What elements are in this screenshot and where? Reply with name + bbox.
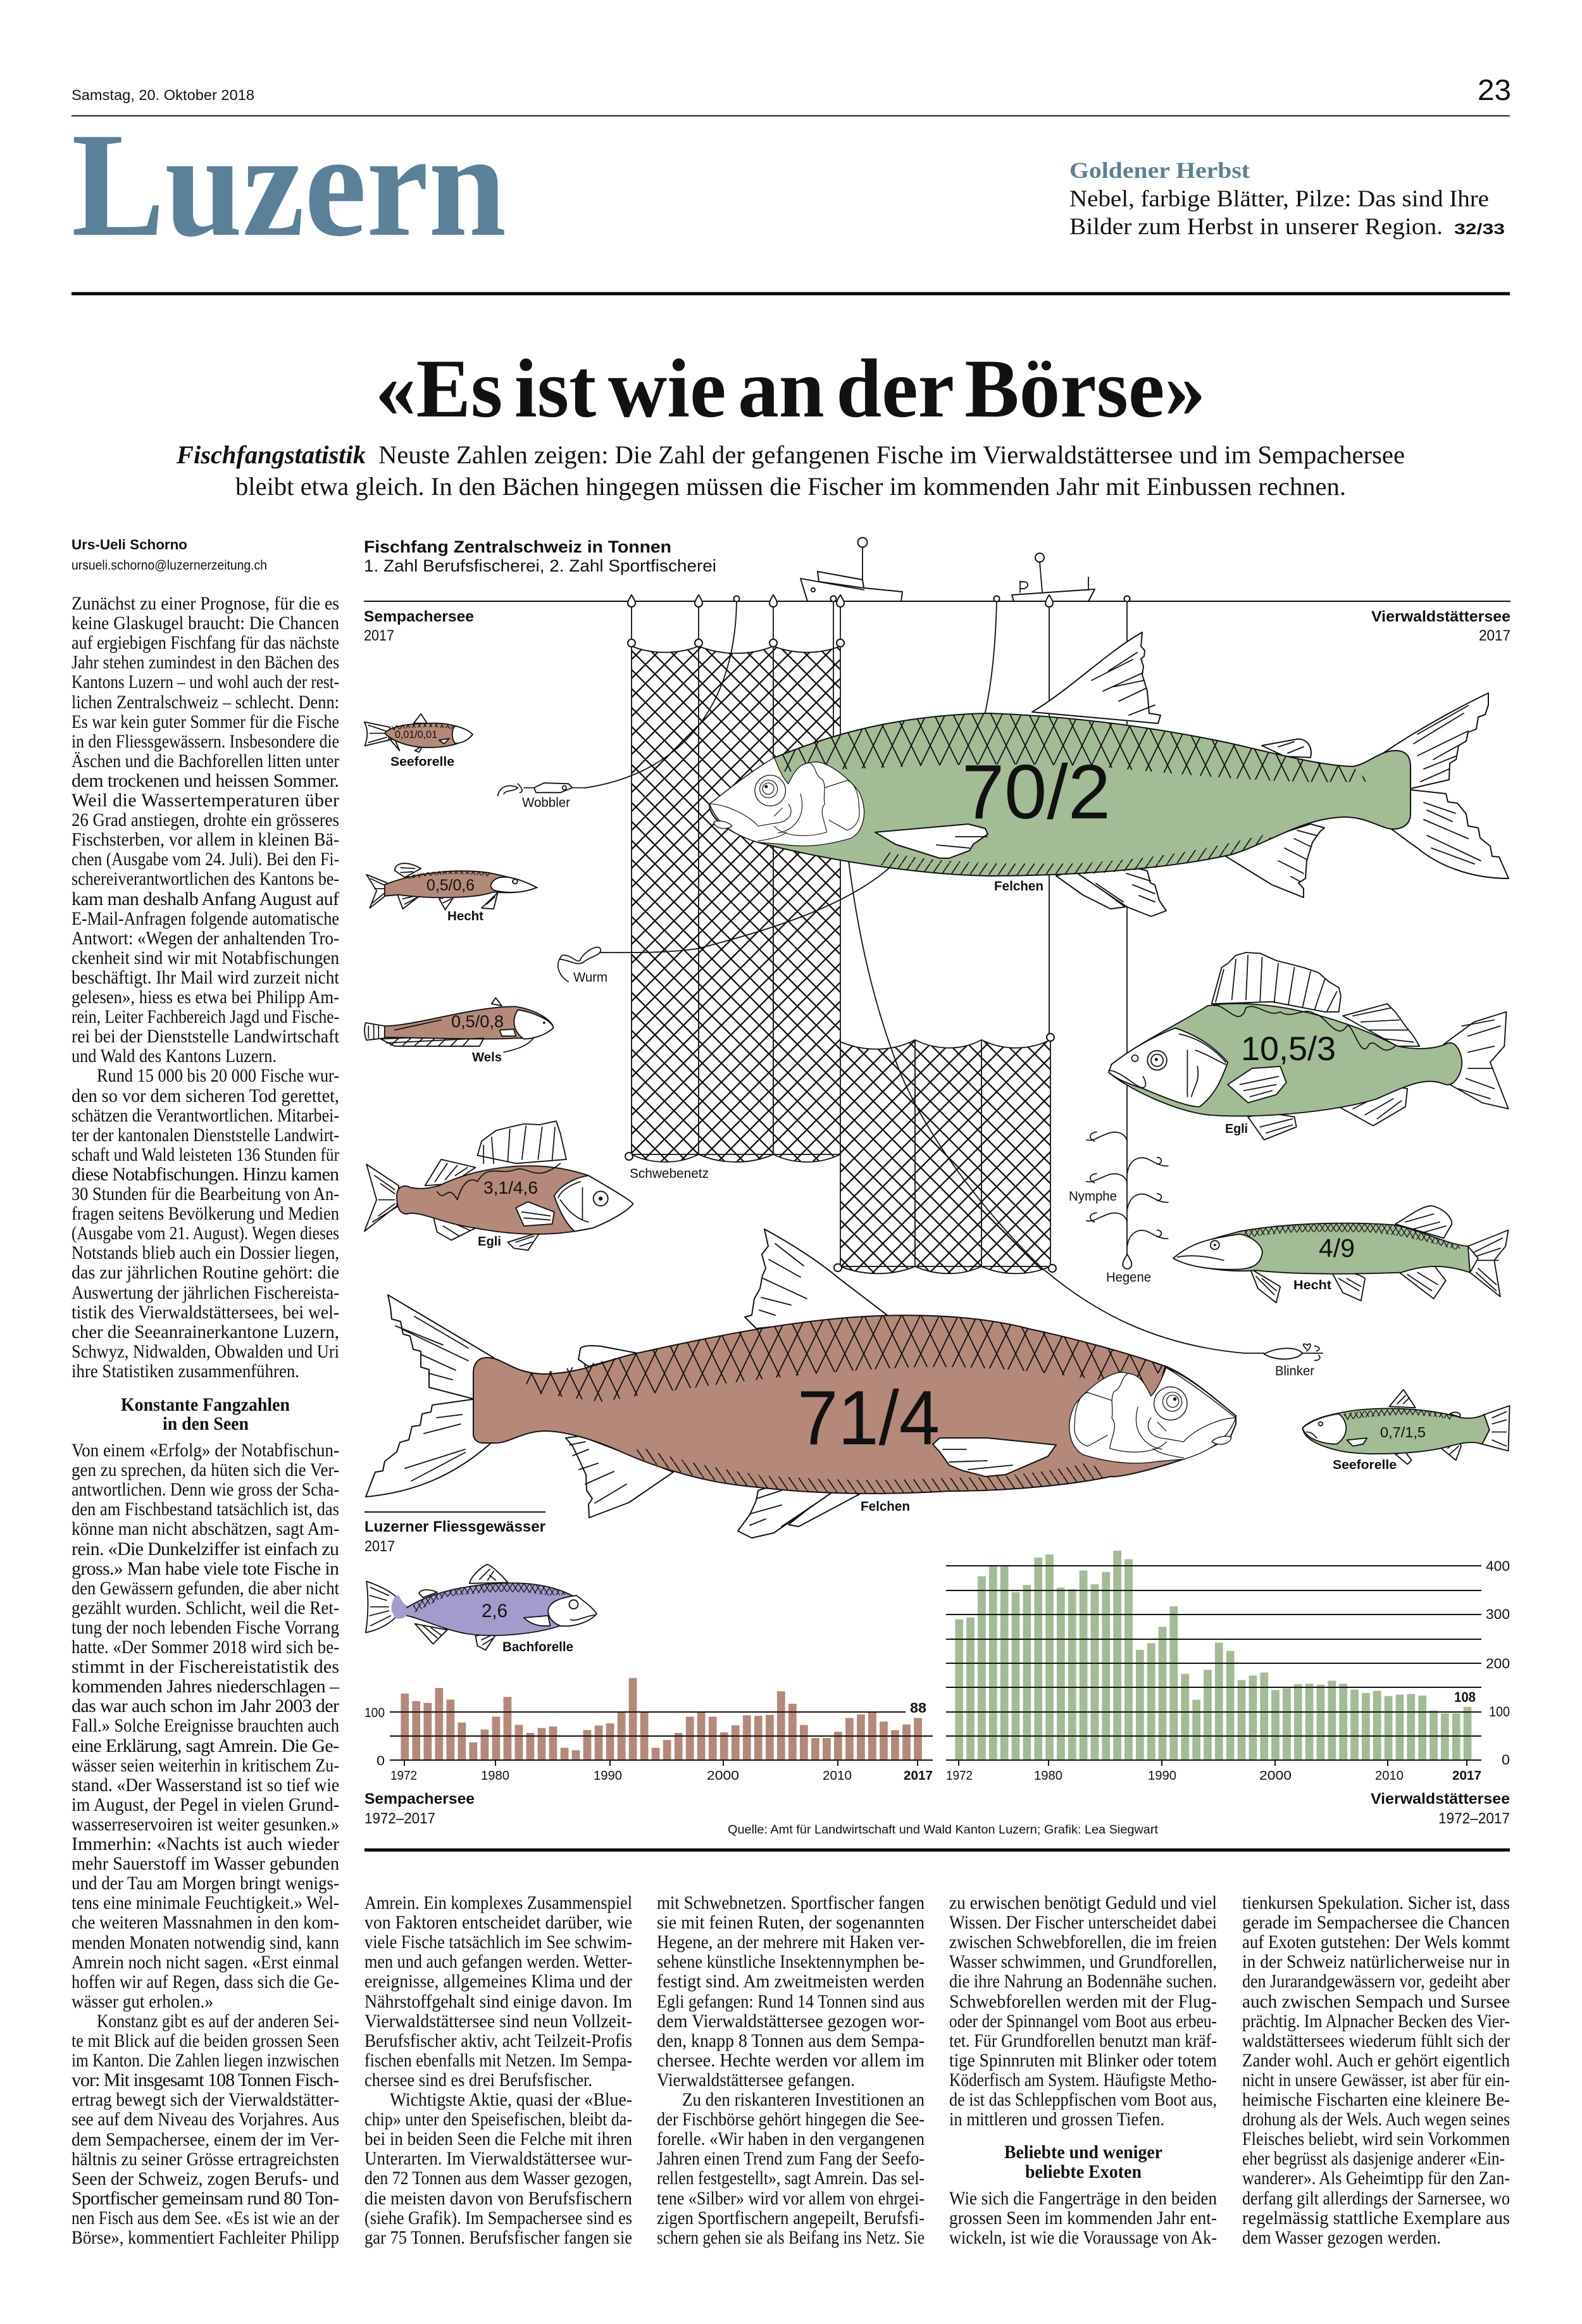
article text column 1: Rund 15 000 bis 20 000 Fische wur- [97, 1065, 339, 1086]
article text column 2: ereignisse, allgemeines Klima und der [364, 1971, 632, 1992]
article text column 1: auf ergiebigen Fischfang für das nächste [72, 632, 339, 653]
article text column 1: stimmt in der Fischereistatistik des [72, 1656, 339, 1677]
article text column 1: schätzen die Verantwortlichen. Mitarbei- [72, 1105, 339, 1126]
main headline: «Es ist wie an der Börse» [375, 342, 1205, 435]
axis labels: 108 [1454, 1689, 1476, 1705]
article text column 1: und der Tau am Morgen bringt wenigs- [72, 1873, 339, 1894]
article text column 1: cher die Seeanrainerkantone Luzern, [72, 1321, 339, 1342]
article text column 1: ckenheit sind wir mit Notabfischungen [72, 947, 339, 968]
fish: small brown Seeforelle: Seeforelle [390, 755, 454, 769]
article text column 2: viele Fische tatsächlich im See schwim- [364, 1932, 632, 1952]
scales [524, 1315, 1168, 1402]
article text column 3: schern gehen sie als Beifang ins Netz. Sie [657, 2227, 925, 2248]
article text column 1: könne man nicht abschätzen, sagt Am- [72, 1518, 339, 1539]
article text column 1: Fall.» Solche Ereignisse brauchten auch [72, 1715, 339, 1736]
fish: green Seeforelle [1302, 1390, 1510, 1472]
article text column 1: ihre Statistiken zusammenführen. [72, 1361, 299, 1382]
snout [1158, 1367, 1236, 1456]
article text column 1: im August, der Pegel in vielen Grund- [72, 1794, 339, 1815]
chart caption [1371, 1790, 1510, 1827]
article text column 1: ter der kantonalen Dienststelle Landwirt- [72, 1125, 339, 1146]
fish: green Hecht: Hecht [1293, 1278, 1331, 1292]
article text column 2: chip» unter den Speisefischen, bleibt da- [364, 2109, 632, 2130]
boat left [800, 538, 902, 601]
article text column 1: Schwyz, Nidwalden, Obwalden und Uri [72, 1341, 339, 1362]
byline: ursueli.schorno@luzernerzeitung.ch [72, 558, 267, 573]
subheadline: bleibt etwa gleich. In den Bächen hingegen müssen die Fischer im kommenden Jahr mit Einbussen rechnen. [235, 472, 1346, 501]
article text column 1: wässer seien weiterhin in kritischem Zu- [72, 1755, 339, 1776]
article text column 1: hoffen wir auf Regen, dass sich die Ge- [72, 1971, 339, 1992]
article text column 1: Kantons Luzern – und wohl auch der rest- [72, 672, 339, 692]
article text column 1: 30 Stunden für die Bearbeitung von An- [72, 1184, 339, 1204]
axis labels: 2000 [707, 1769, 739, 1783]
article text column 1: dem trockenen und heissen Sommer. [72, 770, 339, 791]
article text column 5: dem Wasser gezogen werden. [1242, 2227, 1441, 2248]
article text column 5: Fleisches beliebt, wird sein Vorkommen [1242, 2128, 1510, 2149]
dorsal fin [745, 1229, 887, 1328]
article text column 3 [657, 1892, 925, 2248]
article text column 1: gezählt wurden. Schlicht, weil die Ret- [72, 1597, 339, 1618]
label: Luzerner Fliessgewässer 2017 [364, 1511, 545, 1555]
axis labels: 1980 [481, 1769, 509, 1783]
species label: Felchen [994, 879, 1043, 894]
head [1069, 1368, 1236, 1463]
subheadline [176, 440, 1405, 501]
axis labels: 1990 [1148, 1769, 1176, 1783]
graphic title [364, 537, 716, 575]
article text column 2: Berufsfischer aktiv, acht Teilzeit-Profis [364, 2030, 632, 2051]
fish: small brown Hecht: 0,5/0,6 [427, 877, 475, 894]
article text column 1: Notstands blieb auch ein Dossier liegen, [72, 1242, 339, 1263]
article text column 5: den Jurarandgewässern vor, gedeiht aber [1242, 1971, 1510, 1992]
byline [72, 537, 267, 573]
article text column 3: Vierwaldstättersee gefangen. [657, 2070, 855, 2090]
tail [1371, 693, 1509, 878]
article text column 4: tet. Für Grundforellen benutzt man kräf- [949, 2030, 1217, 2051]
article text column 3: Zu den riskanteren Investitionen an [682, 2089, 925, 2110]
label: Vierwaldstättersee 2017: Vierwaldstättersee [1371, 608, 1510, 625]
value: 70/2 [962, 749, 1111, 835]
article text column 5: derfang gilt allerdings der Sarnersee, wo [1242, 2188, 1510, 2209]
article text column 4: Wasser schwimmen, und Grundforellen, [949, 1951, 1217, 1972]
tail [366, 1295, 494, 1497]
article text column 1: Amrein noch nicht sagen. «Erst einmal [72, 1952, 339, 1973]
article text column 2: Amrein. Ein komplexes Zusammenspiel [364, 1892, 632, 1913]
lure: Hegene with nymphs: Hegene [1106, 1270, 1151, 1285]
article text column 1: rein. «Die Dunkelziffer ist einfach zu [72, 1539, 339, 1559]
article text column 5: gerade im Sempachersee die Chancen [1242, 1912, 1510, 1933]
article text column 1: fragen seitens Bevölkerung und Medien [72, 1203, 339, 1224]
ventral fins [738, 1478, 877, 1538]
article text column 1: tung der noch lebenden Fische Vorrang [72, 1617, 339, 1638]
article text column 5: drohung als der Wels. Auch wegen seines [1242, 2109, 1510, 2130]
article text column 2: fischen ebenfalls mit Netzen. Im Sempa- [364, 2050, 632, 2071]
article text column 1: Sportfischer gemeinsam rund 80 Ton- [72, 2188, 339, 2209]
fish: small brown Egli: 3,1/4,6 [483, 1178, 538, 1197]
fish: small brown Hecht: Hecht [447, 909, 483, 923]
article text column 1: E-Mail-Anfragen folgende automatische [72, 908, 339, 929]
article text column 4: wickeln, ist wie die Voraussage von Ak- [949, 2227, 1217, 2248]
article text column 1: rein, Leiter Fachbereich Jagd und Fische- [72, 1006, 339, 1027]
article text column 1: che weiteren Massnahmen in den kom- [72, 1912, 339, 1933]
article text column 5 [1242, 1892, 1510, 2248]
axis labels [946, 1558, 1510, 1783]
axis labels: 2017 [904, 1769, 933, 1783]
article text column 5: regelmässig stattliche Exemplare aus [1242, 2208, 1510, 2228]
fishing lines with lures [585, 602, 1244, 1353]
chart caption: Sempachersee [364, 1790, 475, 1808]
anal fin [1226, 824, 1324, 897]
label: Vierwaldstättersee 2017: 2017 [1479, 627, 1510, 644]
fish: big brown Felchen, Sempachersee [366, 1229, 1236, 1538]
fish: small brown Egli: Egli [478, 1235, 501, 1249]
article text column 4: Wie sich die Fangerträge in den beiden [949, 2188, 1217, 2209]
bars [955, 1551, 1471, 1760]
section nameplate: Luzern: Luzern [72, 103, 506, 268]
article text column 5: eher begrüsst als dasjenige anderer «Ein- [1242, 2148, 1505, 2169]
axis labels: 1990 [594, 1769, 622, 1783]
anal fin [566, 1436, 673, 1518]
article text column 1: kam man deshalb Anfang August auf [72, 889, 339, 909]
article text column 1: mehr Sauerstoff im Wasser gebunden [72, 1853, 339, 1874]
article text column 4: in mittleren und grossen Tiefen. [949, 2109, 1164, 2130]
article text column 2: Nährstoffgehalt sind einige davon. Im [364, 1991, 632, 2012]
article text column 1: Börse», kommentiert Fachleiter Philipp [72, 2227, 339, 2248]
article text column 3: sie mit feinen Ruten, der sogenannten [657, 1912, 925, 1933]
article text column 1: keine Glaskugel braucht: Die Chancen [72, 613, 339, 634]
chart caption: Vierwaldstättersee [1371, 1790, 1510, 1808]
axis labels: 2010 [1375, 1769, 1404, 1783]
article text column 4: tige Spinnruten mit Blinker oder totem [949, 2050, 1217, 2071]
article text column 1: Zunächst zu einer Prognose, für die es [72, 593, 339, 614]
axis labels: 88 [910, 1700, 926, 1716]
article text column 1: hältnis zu seiner Grösse ertragreichsten [72, 2149, 339, 2170]
article text column 3: Jahren einen Trend zum Fang der Seefo- [657, 2148, 925, 2169]
article text column 1: (Ausgabe vom 21. August). Wegen dieses [72, 1223, 339, 1244]
axis labels: 400 [1486, 1558, 1510, 1574]
article text column 1: nen Fisch aus dem See. «Es ist wie an der [72, 2208, 339, 2228]
article text column 2: gar 75 Tonnen. Berufsfischer fangen sie [364, 2227, 632, 2248]
article text column 2: den 72 Tonnen aus dem Wasser gezogen, [364, 2168, 632, 2189]
fish: small brown Wels: 0,5/0,8 [451, 1012, 504, 1031]
lure: Wobbler: Wobbler [522, 796, 570, 810]
article text column 2: die meisten davon von Berufsfischern [364, 2188, 632, 2209]
fish: green Hecht: 4/9 [1319, 1234, 1355, 1263]
adipose fin [1262, 739, 1311, 758]
article text column 2: Vierwaldstättersee sind neun Vollzeit- [364, 2011, 632, 2032]
article text column 1: Jahr stehen zumindest in den Bächen des [72, 652, 339, 673]
article text column 1: ertrag bewegt sich der Vierwaldstätter- [72, 2089, 339, 2110]
article text column 5: in der Schweiz natürlicherweise nur in [1242, 1951, 1510, 1972]
article text column 1: kommenden Jahres niederschlagen – [72, 1676, 340, 1697]
article text column 4 [949, 1892, 1217, 2248]
chart caption: 1972–2017 [1438, 1810, 1510, 1827]
fish: small brown Seeforelle: 0,01/0,01 [395, 729, 437, 740]
net lower [834, 1034, 1056, 1273]
article text column 5: prächtig. Im Alpnacher Becken des Vier- [1242, 2011, 1510, 2032]
article text column 3: zigen Sportfischern angepeilt, Berufsfi- [657, 2208, 925, 2228]
fish: purple Bachforelle: Bachforelle [502, 1640, 573, 1654]
article text column 1: Von einem «Erfolg» der Notabfischun- [72, 1440, 339, 1461]
article text column 1: menden Monaten notwendig sind, kann [72, 1932, 339, 1953]
pectoral fin [875, 824, 988, 858]
chart caption [364, 1790, 475, 1827]
article text column 1: see auf dem Niveau des Vorjahres. Aus [72, 2109, 339, 2130]
axis labels: 2017 [1452, 1769, 1481, 1783]
article text column 1: stand. «Der Wasserstand ist so tief wie [72, 1775, 339, 1796]
article text column 1: Seen der Schweiz, zogen Berufs- und [72, 2168, 339, 2189]
article text column 2 [364, 1892, 632, 2248]
fish: green Hecht [1173, 1206, 1509, 1303]
article text column 1: eine Erklärung, sagt Amrein. Die Ge- [72, 1735, 339, 1756]
article text column 5: tienkursen Spekulation. Sicher ist, dass [1242, 1892, 1510, 1913]
ventral fins [1040, 861, 1166, 916]
lure: Wurm [558, 947, 621, 985]
lure: Blinker: Blinker [1275, 1364, 1314, 1378]
label: Sempachersee 2017: Sempachersee [364, 608, 474, 625]
fish: big green Felchen, Vierwaldstättersee [709, 632, 1509, 916]
axis labels: 1980 [1034, 1769, 1062, 1783]
article text column 1: Konstante Fangzahlen [121, 1394, 290, 1415]
label: Luzerner Fliessgewässer 2017: 2017 [364, 1538, 395, 1555]
lure: Blinker [1244, 1344, 1323, 1378]
article text column 3: Hegene, an der mehrere mit Haken ver- [657, 1932, 925, 1952]
article text column 4: Beliebte und weniger [1004, 2142, 1162, 2163]
article text column 1: in den Fliessgewässern. Insbesondere die [72, 731, 339, 752]
article text column 1: Antwort: «Wegen der anhaltenden Tro- [72, 928, 339, 949]
graphic title: 1. Zahl Berufsfischerei, 2. Zahl Sportfischerei [364, 556, 716, 575]
label: Luzerner Fliessgewässer 2017: Luzerner Fliessgewässer [364, 1518, 545, 1535]
article text column 1: Auswertung der jährlichen Fischereista- [72, 1282, 339, 1303]
label: Sempachersee 2017 [364, 608, 474, 644]
article text column 1: das zur jährlichen Routine gehört: die [72, 1262, 339, 1283]
lure: Wobbler [497, 783, 587, 810]
axis labels: 300 [1486, 1606, 1510, 1622]
teaser: Goldener Herbst: 32/33 [1454, 221, 1505, 238]
article text column 4: Wissen. Der Fischer unterscheidet dabei [949, 1912, 1217, 1933]
article text column 4: Köderfisch am System. Häufigste Metho- [949, 2070, 1217, 2090]
article text column 1: lichen Zentralschweiz – schlecht. Denn: [72, 692, 339, 713]
subheadline: Neuste Zahlen zeigen: Die Zahl der gefangenen Fische im Vierwaldstättersee und im Sempachersee [378, 440, 1405, 469]
article text column 1: 26 Grad anstiegen, drohte ein grösseres [72, 809, 339, 830]
page number: 23 [1478, 73, 1511, 106]
article text column 1: hatte. «Der Sommer 2018 wird sich be- [72, 1637, 339, 1658]
article text column 5: heimische Fischarten eine kleinere Be- [1242, 2089, 1510, 2110]
water surface line [364, 601, 1510, 602]
article text column 2: chersee sind es drei Berufsfischer. [364, 2070, 592, 2090]
pectoral fin [933, 1438, 1056, 1477]
article text column 1: gen zu sprechen, da hüten sich die Ver- [72, 1459, 339, 1480]
dorsal fin [1032, 632, 1161, 723]
article text column 3: forelle. «Wir haben in den vergangenen [657, 2128, 925, 2149]
article text column 2: (siehe Grafik). Im Sempachersee sind es [364, 2208, 632, 2228]
axis labels: 1972 [946, 1769, 973, 1783]
byline: Urs-Ueli Schorno [72, 537, 187, 553]
body [709, 713, 1411, 876]
article text column 3: dem Vierwaldstättersee gezogen wor- [657, 2011, 925, 2032]
article text column 1: wässer gut erholen.» [72, 1991, 213, 2012]
article text column 1: das war auch schon im Jahr 2003 der [72, 1696, 339, 1716]
article text column 5: nicht in unsere Gewässer, ist aber für ein- [1242, 2070, 1510, 2090]
article text column 2: von Faktoren entscheidet darüber, wie [364, 1912, 632, 1933]
article text column 1: dem Sempachersee, einem der im Ver- [72, 2129, 339, 2150]
article text column 1: gelesen», hiess es etwa bei Philipp Am- [72, 987, 339, 1008]
article text column 5: Zander wohl. Auch er gehört eigentlich [1242, 2050, 1510, 2071]
adipose fin [578, 1346, 637, 1366]
article text column 3: festigt sind. Am zweitmeisten werden [657, 1971, 925, 1992]
article text column 1: den Gewässern gefunden, die aber nicht [72, 1578, 340, 1599]
article text column 4: Schwebforellen werden mit der Flug- [949, 1991, 1217, 2012]
article text column 5: auch zwischen Sempach und Sursee [1242, 1991, 1510, 2012]
article text column 1: tistik des Vierwaldstättersees, bei wel- [72, 1302, 339, 1323]
article text column 5: waldstättersees wiederum fühlt sich der [1242, 2030, 1510, 2051]
lure: Wurm: Wurm [573, 970, 607, 985]
article text column 1: schereiverantwortlichen des Kantons be- [72, 868, 339, 889]
article text column 1: im Kanton. Die Zahlen liegen inzwischen [72, 2050, 339, 2071]
article text column 1: Immerhin: «Nachts ist auch wieder [72, 1834, 339, 1854]
article text column 5: wanderer». Als Geheimtipp für den Zan- [1242, 2168, 1510, 2189]
value: 71/4 [797, 1375, 940, 1461]
subheadline: Fischfangstatistik [176, 440, 366, 469]
axis labels: 1972 [390, 1769, 417, 1783]
belly hatch [633, 1446, 1111, 1494]
bar chart: Vierwaldstättersee 1972–2017 [946, 1551, 1510, 1827]
article text column 1: Fischsterben, vor allem in kleinen Bä- [72, 829, 339, 850]
fish: green Seeforelle: Seeforelle [1333, 1458, 1397, 1472]
article text column 2: men und auch gefangen werden. Wetter- [364, 1951, 632, 1972]
source credit: Quelle: Amt für Landwirtschaft und Wald Kanton Luzern; Grafik: Lea Siegwart [728, 1823, 1159, 1837]
article text column 3: den, knapp 8 Tonnen aus dem Sempa- [657, 2030, 925, 2051]
article text column 3: der Fischbörse gehört hingegen die See- [657, 2109, 925, 2130]
label: Vierwaldstättersee 2017 [1371, 608, 1510, 644]
fish: purple Bachforelle [366, 1565, 597, 1654]
axis labels: 100 [364, 1706, 385, 1720]
article text column 4: oder der Spinnangel vom Boot aus erbeu- [949, 2011, 1217, 2032]
article text column 4: zwischen Schwebforellen, die im freien [949, 1932, 1217, 1952]
article text column 5: auf Exoten gutstehen: Der Wels kommt [1242, 1932, 1510, 1952]
article text column 1: diese Notabfischungen. Hinzu kamen [72, 1164, 339, 1185]
article text column 3: chersee. Hechte werden vor allem im [657, 2050, 925, 2071]
article text column 4: beliebte Exoten [1025, 2161, 1142, 2182]
teaser: Goldener Herbst: Goldener Herbst [1069, 158, 1250, 183]
scales [775, 713, 1368, 782]
lure: Hegene with nymphs: Nymphe [1069, 1189, 1117, 1204]
article text column 2: Wichtigste Aktie, quasi der «Blue- [390, 2089, 632, 2110]
article text column 1: vor: Mit insgesamt 108 Tonnen Fisch- [72, 2070, 339, 2090]
axis labels: 200 [1486, 1656, 1510, 1671]
axis labels: 2000 [1259, 1769, 1292, 1783]
article text column 1: den so vor dem sicheren Tod gerettet, [72, 1085, 339, 1106]
article text column 4: zu erwischen benötigt Geduld und viel [949, 1892, 1217, 1913]
article text column 3: mit Schwebnetzen. Sportfischer fangen [657, 1892, 925, 1913]
axis labels: 0 [1502, 1752, 1510, 1768]
header date: Samstag, 20. Oktober 2018 [72, 87, 254, 103]
lure: Hegene with nymphs [1069, 1132, 1168, 1285]
article text column 3: tene «Silber» wird vor allem von ehrgei- [657, 2188, 925, 2209]
article text column 1: in den Seen [163, 1413, 249, 1434]
article text column 2: Unterarten. Im Vierwaldstättersee wur- [364, 2148, 632, 2169]
species label: Felchen [861, 1499, 910, 1514]
article text column 2: bei in beiden Seen die Felche mit ihren [364, 2128, 632, 2149]
fish: green Egli [1109, 953, 1509, 1140]
article text column 4: de ist das Schleppfischen vom Boot aus, [949, 2089, 1217, 2110]
fish: small brown Wels: Wels [472, 1051, 502, 1065]
article text column 3: sehene künstliche Insektennymphen be- [657, 1951, 925, 1972]
fish: small brown Egli [364, 1121, 633, 1250]
fish: small brown Wels [364, 997, 554, 1065]
fish: green Egli: Egli [1225, 1122, 1248, 1136]
head [709, 758, 864, 846]
article text column 1: rei bei der Dienststelle Landwirtschaft [72, 1026, 340, 1047]
chart caption: 1972–2017 [364, 1810, 435, 1827]
label: Sempachersee 2017: 2017 [364, 627, 394, 644]
net upper: Schwebenetz [625, 595, 1130, 1181]
article text column 1: wasserreservoiren ist weiter gesunken.» [72, 1814, 339, 1835]
axis labels: 0 [377, 1754, 385, 1768]
teaser: Goldener Herbst: Bilder zum Herbst in unserer Region. [1069, 214, 1443, 240]
graphic title: Fischfang Zentralschweiz in Tonnen [364, 537, 671, 556]
article text column 1: und Wald des Kantons Luzern. [72, 1046, 277, 1066]
article text column 4: die ihre Nahrung an Bodennähe suchen. [949, 1971, 1217, 1992]
fish: green Egli: 10,5/3 [1241, 1030, 1336, 1068]
article text column 1: chen (Ausgabe vom 24. Juli). Bei den Fi- [72, 849, 339, 870]
fish: small brown Hecht [366, 863, 537, 923]
teaser: Goldener Herbst: Nebel, farbige Blätter, Pilze: Das sind Ihre [1069, 186, 1489, 212]
fish: purple Bachforelle: 2,6 [482, 1601, 508, 1621]
article text column 1: Es war kein guter Sommer für die Fische [72, 711, 339, 732]
fish: green Seeforelle: 0,7/1,5 [1380, 1424, 1426, 1440]
article text column 1: tens eine minimale Feuchtigkeit.» Wel- [72, 1892, 339, 1913]
article text column 1: den am Fischbestand tatsächlich ist, das [72, 1499, 339, 1520]
body [473, 1315, 1236, 1494]
boat right [1012, 553, 1095, 601]
article text column 1: beschäftigt. Ihr Mail wird zurzeit nicht [72, 967, 340, 988]
article text column 1: antwortlichen. Denn wie gross der Scha- [72, 1479, 339, 1500]
axis labels: 2010 [823, 1769, 852, 1783]
article text column 4: grossen Seen im kommenden Jahr ent- [949, 2208, 1217, 2228]
net upper: Schwebenetz: Schwebenetz [630, 1166, 709, 1181]
article text column 3: rellen festgestellt», sagt Amrein. Das sel- [657, 2168, 925, 2189]
axis labels: 100 [1489, 1704, 1510, 1720]
article text column 1: schaft und Wald leisteten 136 Stunden für [72, 1144, 339, 1165]
article text column 1: Weil die Wassertemperaturen über [72, 790, 339, 811]
axis labels [364, 1700, 933, 1783]
fish: small brown Seeforelle [364, 714, 473, 769]
bar chart: Sempachersee 1972–2017 [364, 1678, 933, 1827]
article text column 1: te mit Blick auf die beiden grossen Seen [72, 2030, 339, 2051]
article text column 1: Äschen und die Bachforellen litten unter [72, 751, 339, 772]
belly hatch [879, 834, 1272, 875]
article text column 3: Egli gefangen: Rund 14 Tonnen sind aus [657, 1991, 925, 2012]
article text column 1: gross.» Man habe viele tote Fische in [72, 1558, 339, 1579]
article text column 1: Konstanz gibt es auf der anderen Sei- [97, 2011, 339, 2032]
bars [401, 1678, 922, 1760]
article text column 1 [72, 593, 340, 2248]
teaser: Goldener Herbst [1069, 158, 1505, 240]
